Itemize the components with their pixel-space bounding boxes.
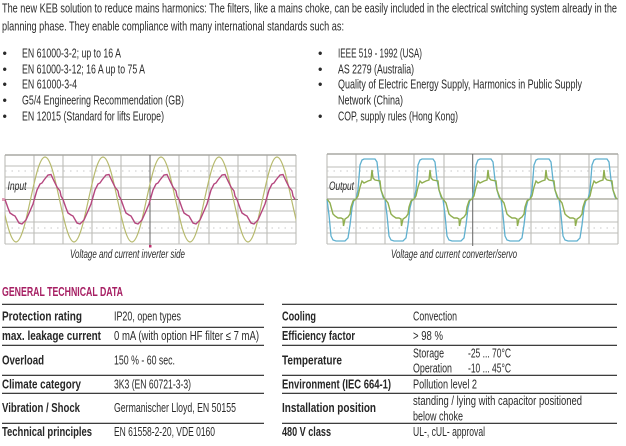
standards list: right: COP, supply rules (Hong Kong)	[338, 110, 458, 124]
intro text	[2, 2, 617, 34]
table: left: EN 61558-2-20, VDE 0160	[114, 425, 215, 439]
intro text: planning phase. They enable compliance with many international standards such as:	[2, 20, 344, 34]
standards list: right: AS 2279 (Australia)	[338, 62, 414, 76]
output label: Output	[329, 179, 354, 193]
current waveform	[327, 170, 617, 226]
table: left: 3K3 (EN 60721-3-3)	[114, 378, 191, 392]
table: right: > 98 %	[413, 329, 443, 343]
table: left	[2, 304, 264, 439]
standards list: left: G5/4 Engineering Recommendation (GB)	[22, 94, 184, 108]
standards list: left	[2, 46, 184, 124]
table: right: Storage	[413, 347, 444, 361]
table: right: Temperature	[282, 353, 342, 368]
standards list: left: •	[2, 110, 7, 124]
current waveform	[5, 174, 295, 224]
standards list: left: •	[2, 78, 7, 92]
table: right: Installation position	[282, 400, 376, 415]
standards list: right: Network (China)	[338, 94, 403, 108]
standards list: right	[318, 46, 582, 124]
caption: input chart: Voltage and current inverter side	[70, 247, 185, 261]
table: right: 480 V class	[282, 424, 331, 439]
table: right	[282, 304, 617, 439]
voltage trapezoid wave	[327, 159, 617, 241]
standards list: left: •	[2, 62, 7, 76]
table: left: Protection rating	[2, 309, 82, 324]
table: right: Cooling	[282, 309, 316, 324]
table: left: max. leakage current	[2, 328, 101, 343]
caption: output chart: Voltage and current converter/servo	[391, 247, 517, 261]
table: left: 0 mA (with option HF filter ≤ 7 mA)	[114, 329, 259, 343]
standards list: right: •	[318, 46, 322, 60]
table: right: Environment (IEC 664-1)	[282, 377, 391, 392]
table: right: -10 ... 45°C	[468, 362, 511, 376]
table: left: Germanischer Lloyd, EN 50155	[114, 401, 236, 415]
table: left: IP20, open types	[114, 310, 181, 324]
table: left: Overload	[2, 353, 44, 368]
table: left: Vibration / Shock	[2, 400, 80, 415]
chart: input voltage and current	[2, 154, 298, 248]
table: left: Climate category	[2, 377, 81, 392]
standards list: right: IEEE 519 - 1992 (USA)	[338, 46, 422, 60]
standards list: left: EN 61000-3-12; 16 A up to 75 A	[22, 62, 145, 76]
standards list: left: EN 12015 (Standard for lifts Europe)	[22, 110, 164, 124]
chart: output voltage and current	[327, 154, 618, 246]
table: right: UL-, cUL- approval	[413, 425, 485, 439]
standards list: right: •	[318, 110, 322, 124]
standards list: left: •	[2, 94, 7, 108]
table: left: Technical principles	[2, 424, 92, 439]
table: right: Operation	[413, 362, 452, 376]
table: right: -25 ... 70°C	[468, 347, 511, 361]
table: right: Efficiency factor	[282, 328, 355, 343]
table: right: below choke	[413, 410, 463, 424]
standards list: right: •	[318, 62, 322, 76]
table: left: 150 % - 60 sec.	[114, 354, 175, 368]
heading: general technical data: GENERAL TECHNICAL DATA	[2, 285, 123, 299]
table: right: Pollution level 2	[413, 378, 477, 392]
standards list: right: •	[318, 78, 322, 92]
input label: Input	[8, 179, 27, 193]
voltage sine wave	[5, 156, 296, 243]
table: right: Convection	[413, 310, 457, 324]
standards list: left: EN 61000-3-2; up to 16 A	[22, 46, 121, 60]
standards list: left: EN 61000-3-4	[22, 78, 77, 92]
standards list: left: •	[2, 46, 7, 60]
